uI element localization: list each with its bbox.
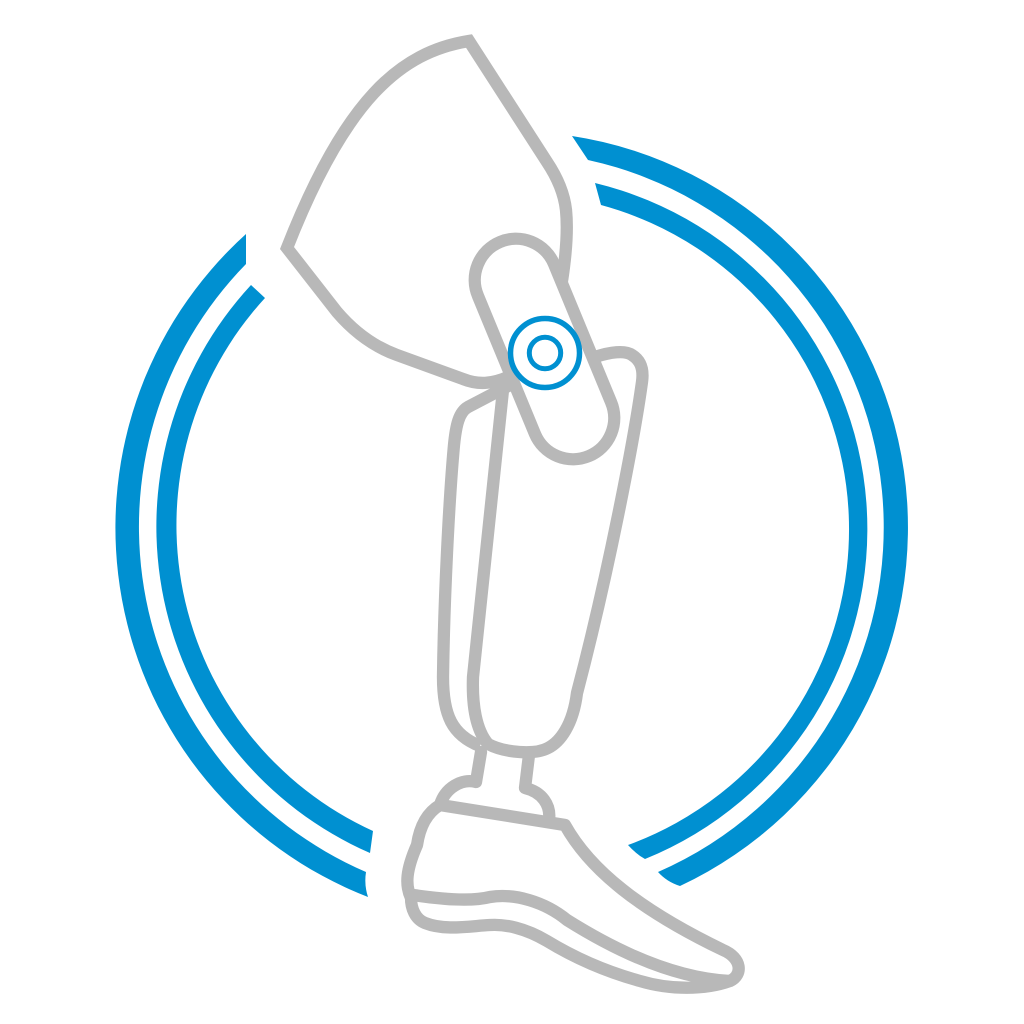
- sole line: [413, 895, 730, 981]
- ring: blue double arcs: [115, 136, 908, 897]
- foot upper: [407, 805, 739, 988]
- outer arc left: [115, 234, 368, 897]
- outer ring: [510, 318, 580, 388]
- knee joint icon: [510, 318, 580, 388]
- ankle pylon right: [525, 755, 549, 820]
- inner arc right: [595, 183, 867, 859]
- shin back wall: [443, 385, 510, 746]
- inner ring: [529, 337, 561, 369]
- outer arc right: [572, 136, 908, 886]
- shin socket: [473, 352, 643, 752]
- knee capsule: [475, 239, 614, 459]
- prosthesis outline: [287, 41, 739, 988]
- thigh: [287, 41, 567, 383]
- inner arc left: [156, 285, 373, 853]
- ankle pylon left: [440, 752, 481, 805]
